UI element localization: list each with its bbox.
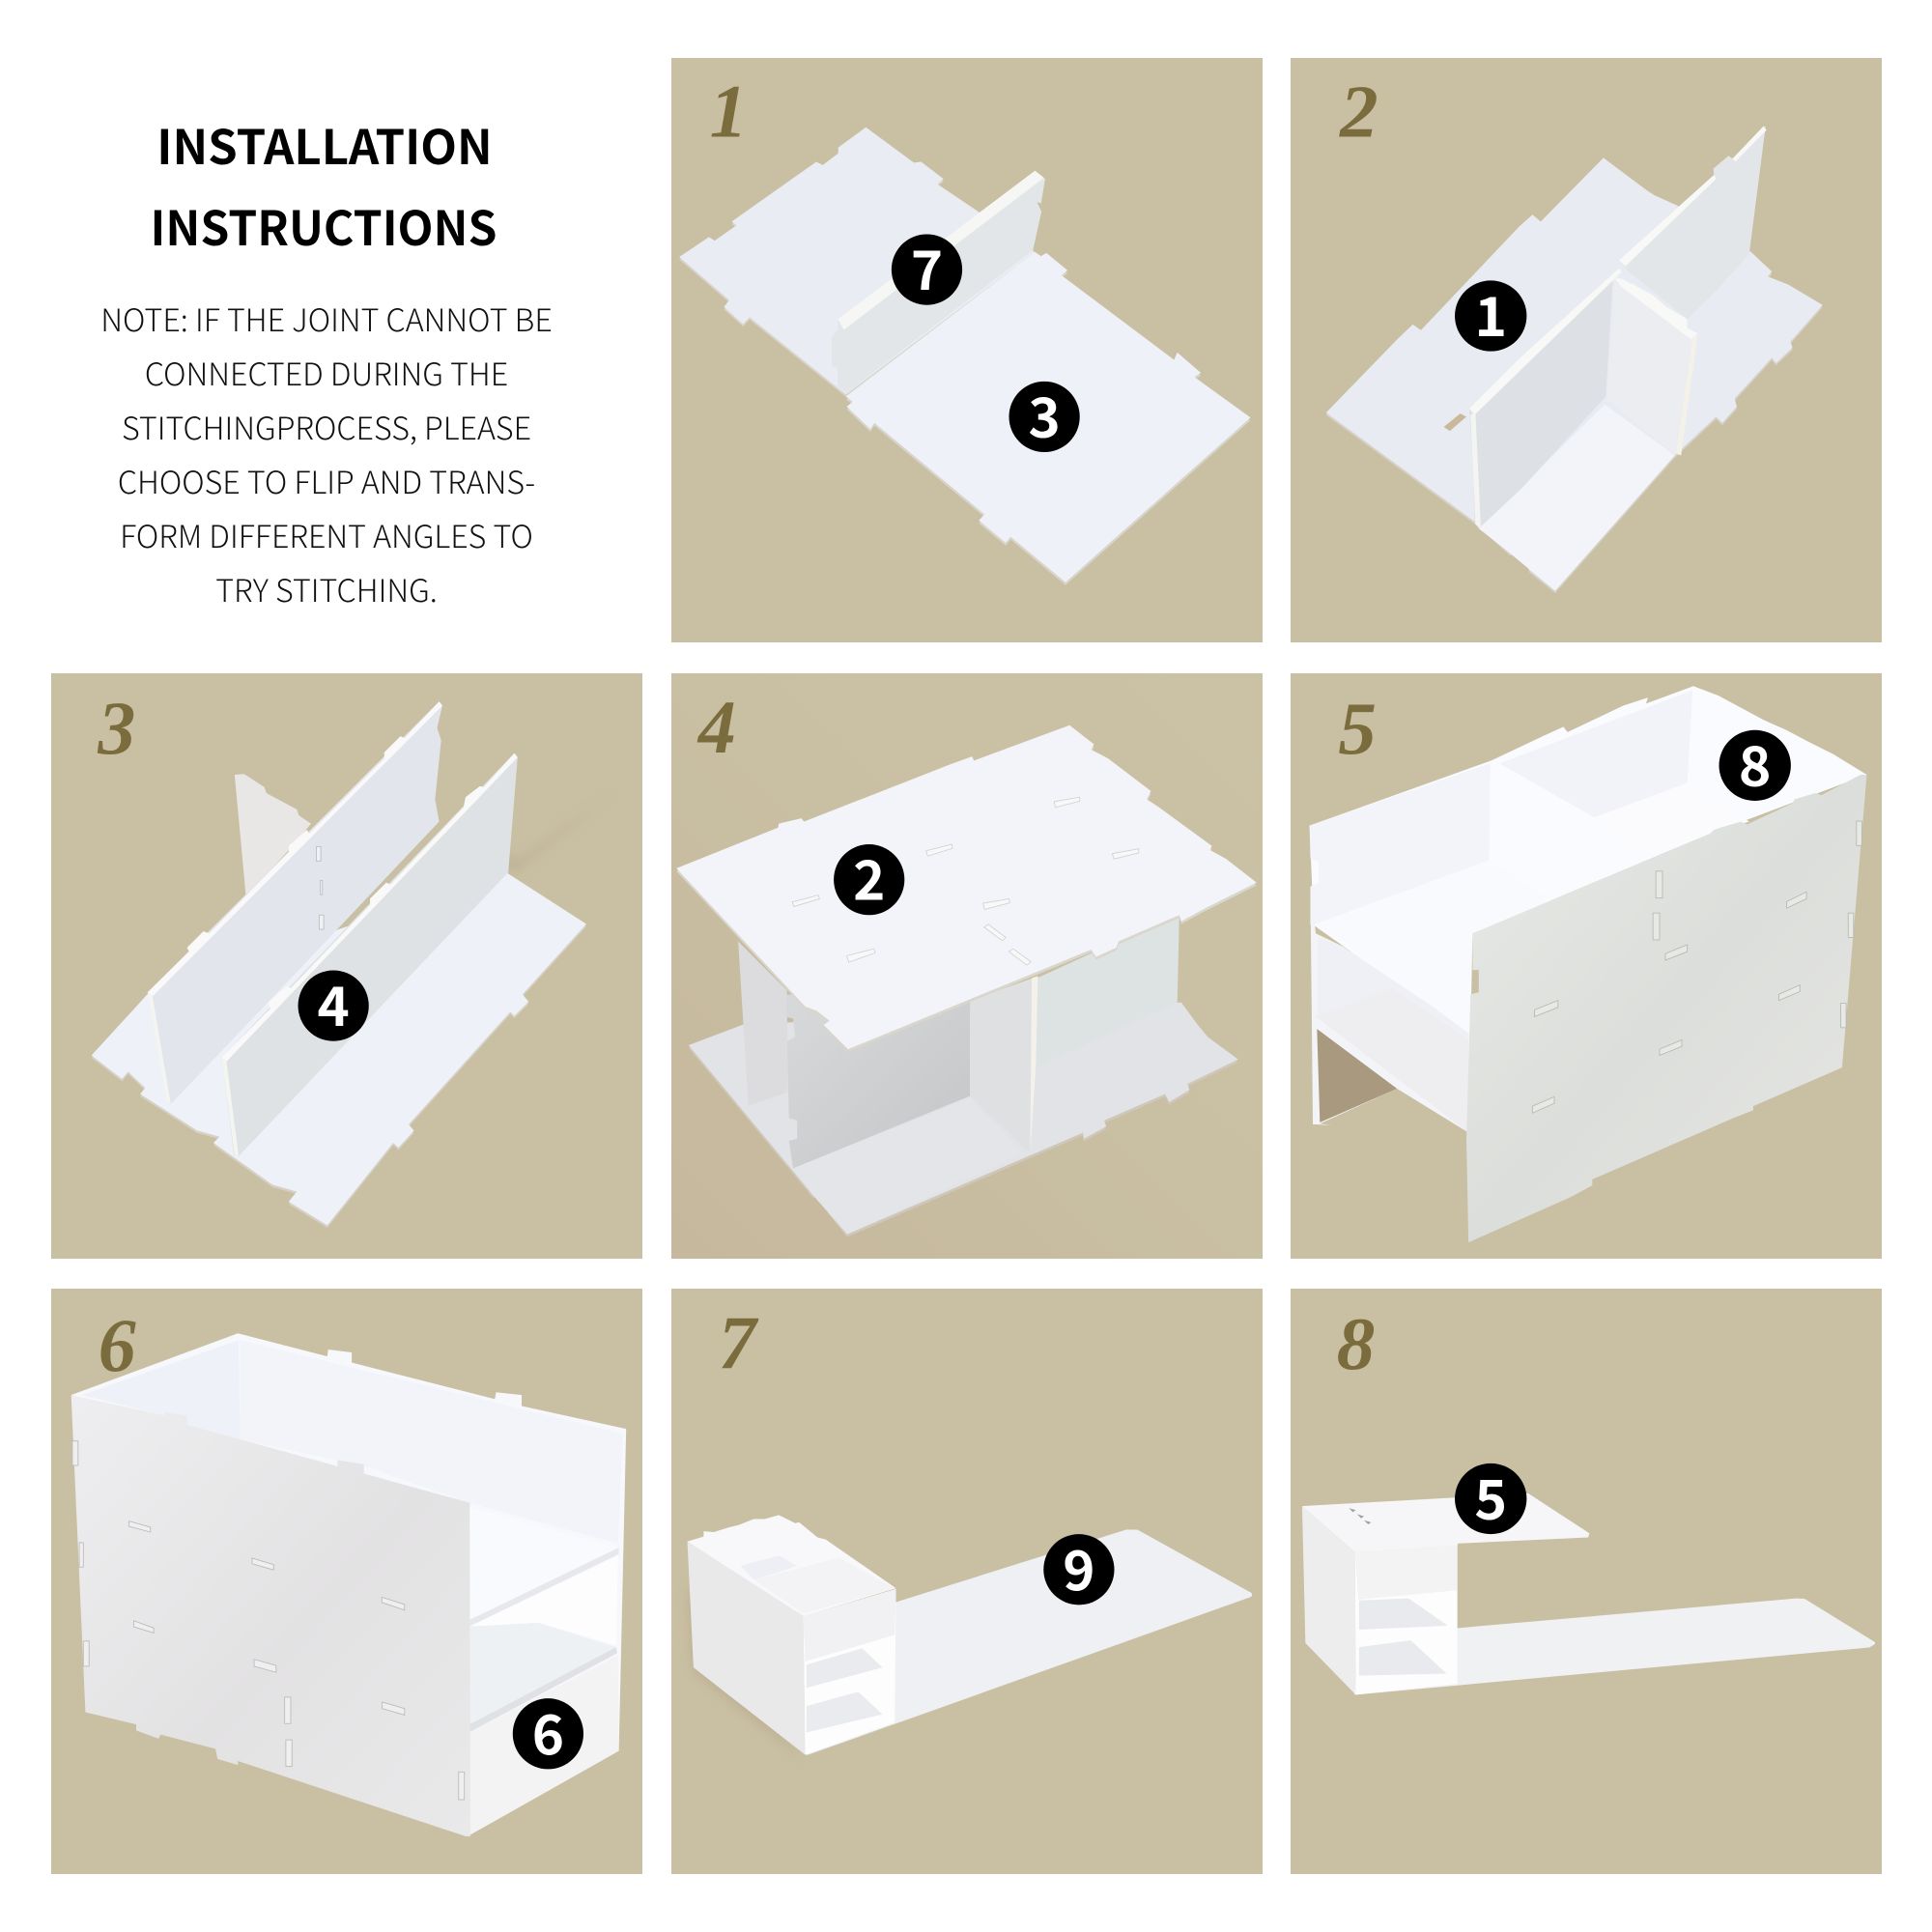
badge 4 — [298, 964, 369, 1042]
back board — [679, 128, 1035, 397]
under-shelf wall — [1310, 887, 1470, 1132]
step number 7: 7 — [719, 1301, 759, 1384]
box side — [688, 1542, 806, 1755]
badge 9 — [1043, 1528, 1115, 1606]
badge 6: 6 — [532, 1692, 564, 1771]
title — [151, 110, 497, 260]
cross partition — [1606, 278, 1697, 455]
box front upper — [1355, 1546, 1458, 1600]
badge 2: 2 — [853, 838, 885, 917]
panel: step 1 — [671, 58, 1263, 642]
step number 5: 5 — [1338, 687, 1377, 770]
badge 6 — [513, 1692, 583, 1771]
lower shelf edge — [469, 1647, 617, 1732]
front floor — [1479, 405, 1675, 591]
badge 7: 7 — [911, 228, 943, 306]
box interior — [688, 1515, 895, 1617]
left wall — [738, 942, 788, 1106]
text block: installation note: NOTE: IF THE JOINT CANNOT BE — [100, 297, 553, 341]
left partition — [148, 701, 442, 1104]
top board slots — [792, 797, 1139, 965]
panel: step 4 — [671, 673, 1263, 1259]
box front — [1355, 1546, 1458, 1694]
left wall — [1310, 763, 1491, 925]
step number 8: 8 — [1337, 1301, 1375, 1385]
badge 3: 3 — [1028, 375, 1061, 453]
step number 1: 1 — [710, 70, 748, 153]
rear partition — [1619, 126, 1767, 319]
text block: installation note: STITCHINGPROCESS, PLEASE — [122, 405, 531, 449]
base board — [92, 872, 586, 1228]
under-shelf shade — [1318, 937, 1468, 1039]
badge 1: 1 — [1474, 274, 1507, 353]
panel: step 7 — [671, 1289, 1263, 1874]
box front upper — [804, 1589, 895, 1662]
lower shelf — [1316, 988, 1468, 1132]
badge 1 — [1455, 274, 1526, 353]
step number 6: 6 — [99, 1304, 136, 1387]
step number 4: 4 — [696, 686, 736, 769]
long board — [1355, 1600, 1873, 1693]
floor — [793, 1098, 1023, 1235]
long board — [804, 1532, 1250, 1752]
box side — [1302, 1506, 1355, 1694]
title: INSTALLATION — [156, 110, 493, 179]
top board — [1302, 1493, 1589, 1552]
upper compartment — [807, 1648, 883, 1688]
cross wall — [970, 976, 1037, 1152]
step number 2: 2 — [1339, 70, 1378, 153]
upper opening — [469, 1555, 618, 1645]
badge 5: 5 — [1474, 1457, 1507, 1535]
badge 2 — [834, 838, 904, 917]
shelf top — [1316, 860, 1553, 1035]
standing divider — [832, 171, 1045, 393]
panel: step 2 — [1291, 58, 1882, 642]
base box — [468, 1656, 619, 1836]
panel: step 3 — [51, 673, 642, 1259]
text block: installation note: CONNECTED DURING THE — [145, 351, 508, 395]
vertical slots — [316, 847, 324, 929]
right partition — [221, 753, 518, 1157]
back wall — [786, 994, 970, 1168]
right wall — [1035, 913, 1179, 1067]
text block: installation note: FORM DIFFERENT ANGLES TO — [120, 513, 533, 557]
badge 7 — [892, 228, 962, 306]
box shadow — [688, 1584, 804, 1759]
step number 3: 3 — [97, 687, 135, 770]
rear cross piece — [235, 774, 311, 896]
upper shelf edge — [469, 1548, 619, 1627]
badge 9: 9 — [1063, 1528, 1095, 1606]
panel: step 8 — [1291, 1289, 1882, 1874]
base board — [1326, 157, 1823, 593]
front partition — [1469, 269, 1621, 528]
badge 8: 8 — [1739, 724, 1772, 802]
title: INSTRUCTIONS — [151, 191, 497, 260]
lower compartment — [1359, 1640, 1447, 1676]
front face slots — [72, 1441, 465, 1800]
rim and interior — [71, 1333, 626, 1836]
lower shelf — [469, 1623, 616, 1724]
upper shelf — [469, 1507, 618, 1621]
slot — [1444, 413, 1466, 431]
top board — [676, 725, 1257, 1052]
interior back wall — [1310, 686, 1866, 1035]
interior rear wall — [81, 1340, 240, 1439]
front board — [846, 252, 1251, 585]
badge 8 — [1719, 724, 1791, 802]
text block: installation note: TRY STITCHING. — [215, 567, 438, 611]
lower compartment — [807, 1691, 883, 1733]
interior long wall — [240, 1340, 623, 1544]
front face — [71, 1395, 470, 1836]
rear compartment floor — [1594, 782, 1749, 856]
panel: step 5 — [1291, 673, 1882, 1259]
rear compartment back wall — [1499, 691, 1692, 817]
floor shadow — [445, 791, 616, 872]
badge 5 — [1455, 1457, 1526, 1535]
badge 4: 4 — [318, 964, 350, 1042]
badge 3 — [1009, 375, 1080, 453]
side face slots — [1532, 821, 1861, 1113]
base board — [689, 1003, 1238, 1237]
side face — [1466, 775, 1866, 1242]
floor under shelf shadow — [1317, 1029, 1397, 1122]
text block: installation note: CHOOSE TO FLIP AND TRANS- — [118, 459, 535, 503]
upper compartment — [1359, 1599, 1448, 1630]
panel: step 6 — [51, 1289, 642, 1874]
text block: installation note — [100, 297, 553, 611]
box front — [804, 1589, 895, 1755]
